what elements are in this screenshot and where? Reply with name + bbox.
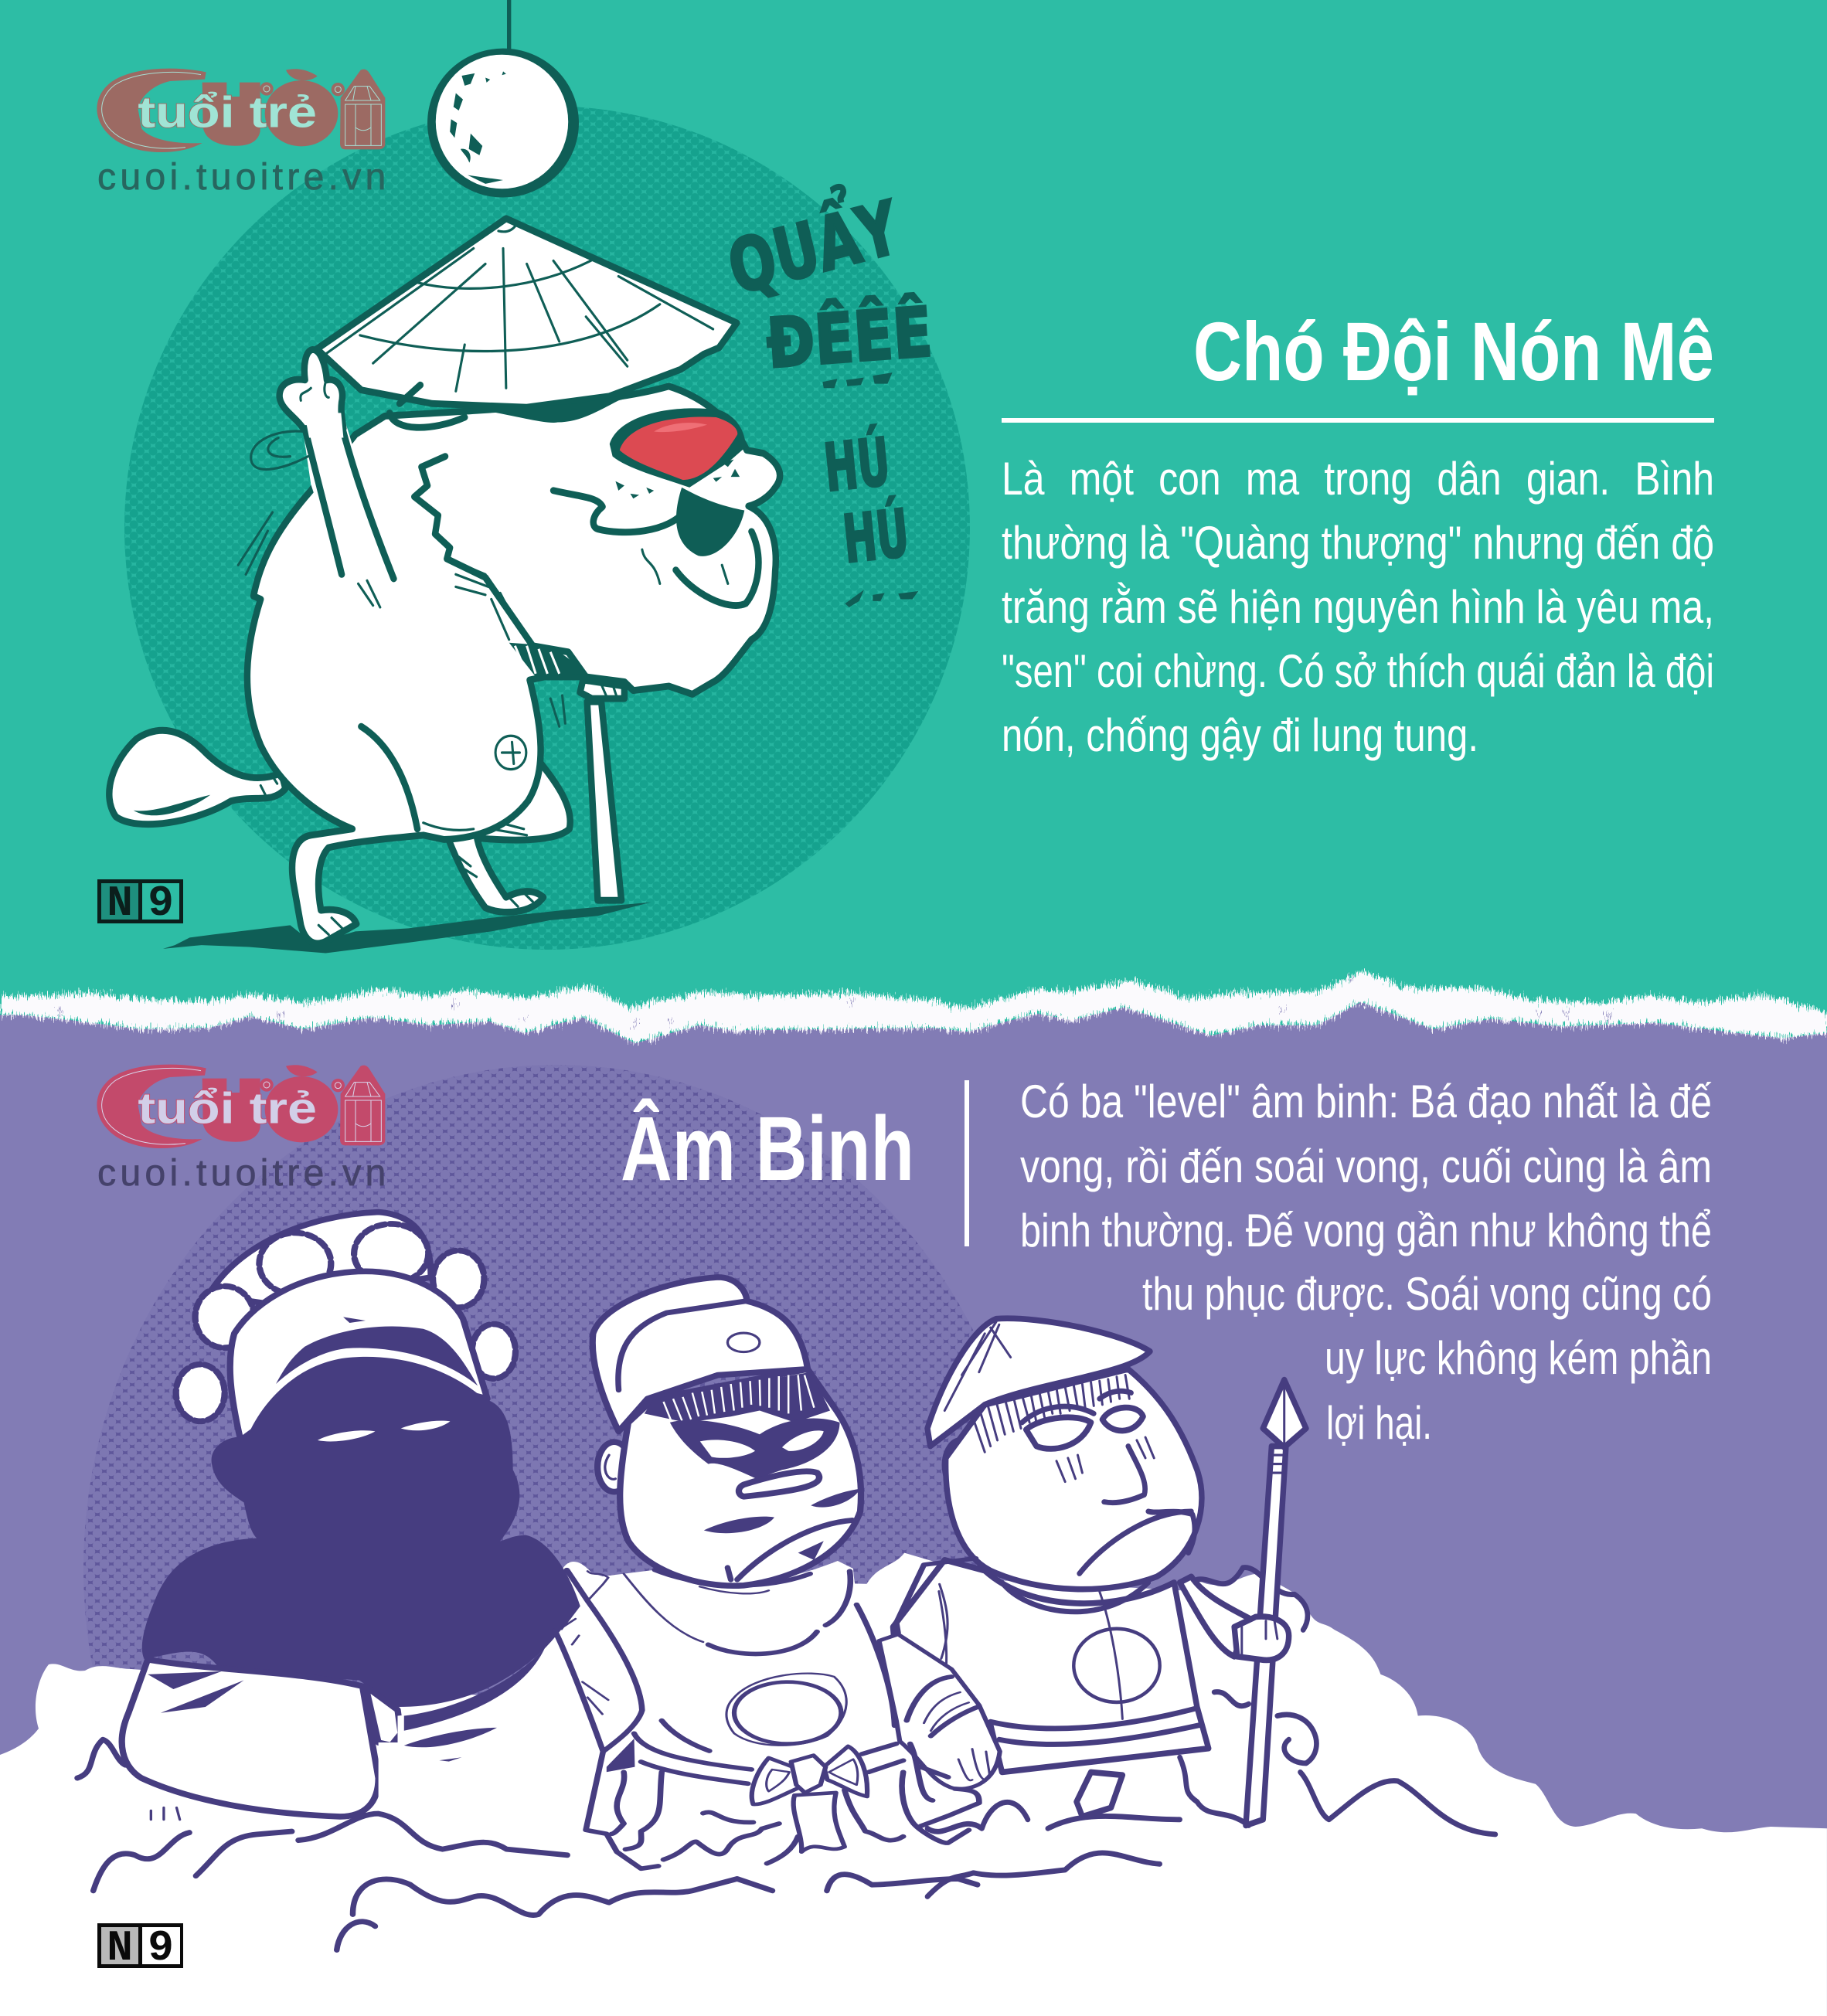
sound effect text: QUẨY [718, 173, 907, 311]
ear [944, 1440, 977, 1490]
arm on cane hatching [509, 643, 586, 677]
crown back [209, 1212, 431, 1304]
cloud bump outline [587, 1571, 608, 1601]
robe [893, 1560, 1209, 1772]
white cloud area: left and centre [0, 1555, 1206, 2016]
sound effect text: HÚ [840, 495, 912, 578]
divider rule under heading [1002, 418, 1714, 423]
soldier shoulder line [896, 1559, 975, 1633]
hand on spear [1234, 1617, 1289, 1660]
ear [597, 1442, 631, 1492]
rear thigh [479, 760, 570, 840]
eyes [1026, 1417, 1091, 1449]
sound effect text: ĐÊÊÊ [764, 292, 934, 384]
text block: dog description [1002, 453, 1714, 761]
folded sleeve [122, 1660, 379, 1817]
pompoms [176, 1224, 515, 1421]
mask [670, 1418, 840, 1479]
hand [280, 349, 343, 428]
badge: N9 purple panel: 9 [148, 1923, 174, 1973]
logo: purple panel: tuổi trẻ [138, 1084, 317, 1133]
illustration: marshal ghost robe and bow [555, 1559, 1000, 1868]
crown band [230, 1271, 488, 1440]
cloud lines: foreground [77, 1739, 978, 1950]
nose and mouth [1104, 1447, 1145, 1503]
illustration: moon [427, 0, 579, 198]
heading: Âm Binh: Âm Binh [621, 1097, 914, 1200]
text block: spirit soldiers description: uy lực không kém phần [1325, 1332, 1712, 1384]
tail [109, 730, 285, 824]
text block: dog description: nón, chống gậy đi lung tung. [1002, 709, 1478, 761]
eyes [318, 1421, 450, 1441]
belt [635, 1733, 903, 1783]
legs [1077, 1772, 1122, 1817]
hand [366, 1686, 401, 1746]
illustration: cat with conical hat [109, 219, 780, 954]
skirt waves [612, 1772, 903, 1864]
text block: spirit soldiers description: lợi hại. [1326, 1397, 1432, 1449]
hair stripes [971, 1375, 1129, 1452]
head and torso silhouette [142, 1357, 580, 1707]
raised arm [301, 416, 393, 577]
chin and collar [655, 1570, 810, 1586]
logo: purple panel [97, 1065, 386, 1194]
bow knot [791, 1756, 825, 1793]
hat shadow [276, 1317, 478, 1385]
belly details [495, 736, 526, 770]
torn paper strip [0, 971, 1827, 1043]
illustration: marshal ghost head [593, 1277, 861, 1586]
face [946, 1369, 1202, 1589]
right arm [1180, 1576, 1249, 1657]
back leg [447, 835, 543, 912]
logo: purple panel: cuoi.tuoitre.vn [97, 1152, 386, 1194]
spear [1246, 1447, 1286, 1825]
robe fill [586, 1561, 907, 1865]
face marks [704, 1489, 860, 1560]
badge: N9 teal panel: N [107, 879, 133, 928]
toes [318, 893, 532, 934]
cloud bumps behind arm [1197, 1568, 1308, 1630]
text block: spirit soldiers description [1020, 1076, 1712, 1449]
badge: N9 teal panel: 9 [148, 879, 174, 928]
logo: teal panel: cuoi.tuoitre.vn [97, 156, 386, 198]
sound effect text: HÚ [821, 423, 893, 507]
badge: N9 teal panel [97, 879, 183, 928]
panel: teal background [0, 0, 1827, 1082]
text block: spirit soldiers description: vong, rồi đến soái vong, cuối cùng là âm [1020, 1141, 1712, 1192]
bow tails [794, 1793, 845, 1852]
shadow under hat [461, 384, 678, 423]
panel: purple background [0, 1002, 1827, 2016]
badge: N9 purple panel [97, 1923, 183, 1973]
illustration: regular soldier with spear [864, 1318, 1495, 1896]
body and head [247, 386, 780, 943]
logo: teal panel: tuổi trẻ [138, 88, 317, 137]
vertical divider [965, 1080, 969, 1246]
arm and hand [879, 1634, 1000, 1789]
mouth [553, 491, 686, 532]
illustration: emperor ghost (dark figure) [122, 1212, 641, 1831]
muzzle marks [615, 460, 740, 498]
logo: teal panel [97, 69, 386, 198]
motion lines [238, 431, 308, 574]
bow loops [752, 1758, 800, 1804]
sound effect text [718, 173, 934, 607]
ground shadow [163, 903, 651, 954]
badge: N9 purple panel: N [107, 1923, 133, 1973]
face [620, 1369, 861, 1586]
emperor sleeve edge [566, 1570, 642, 1752]
white cloud area: right scallops [1197, 1574, 1827, 2016]
hair stripes [645, 1372, 830, 1423]
nose [610, 408, 746, 488]
hat [593, 1277, 808, 1431]
conical hat [927, 1318, 1150, 1447]
halftone circle: purple panel [83, 1065, 1029, 2016]
emblem oval [726, 1674, 846, 1746]
halftone circle: teal panel [124, 106, 970, 950]
cloud bump behind shoulder [864, 1553, 944, 1636]
lower robe [379, 1630, 641, 1831]
nose [739, 1471, 819, 1497]
conical hat [317, 219, 737, 407]
heading: Chó Đội Nón Mê: Chó Đội Nón Mê [1193, 304, 1714, 398]
mane line [414, 457, 586, 677]
cane [587, 702, 621, 900]
